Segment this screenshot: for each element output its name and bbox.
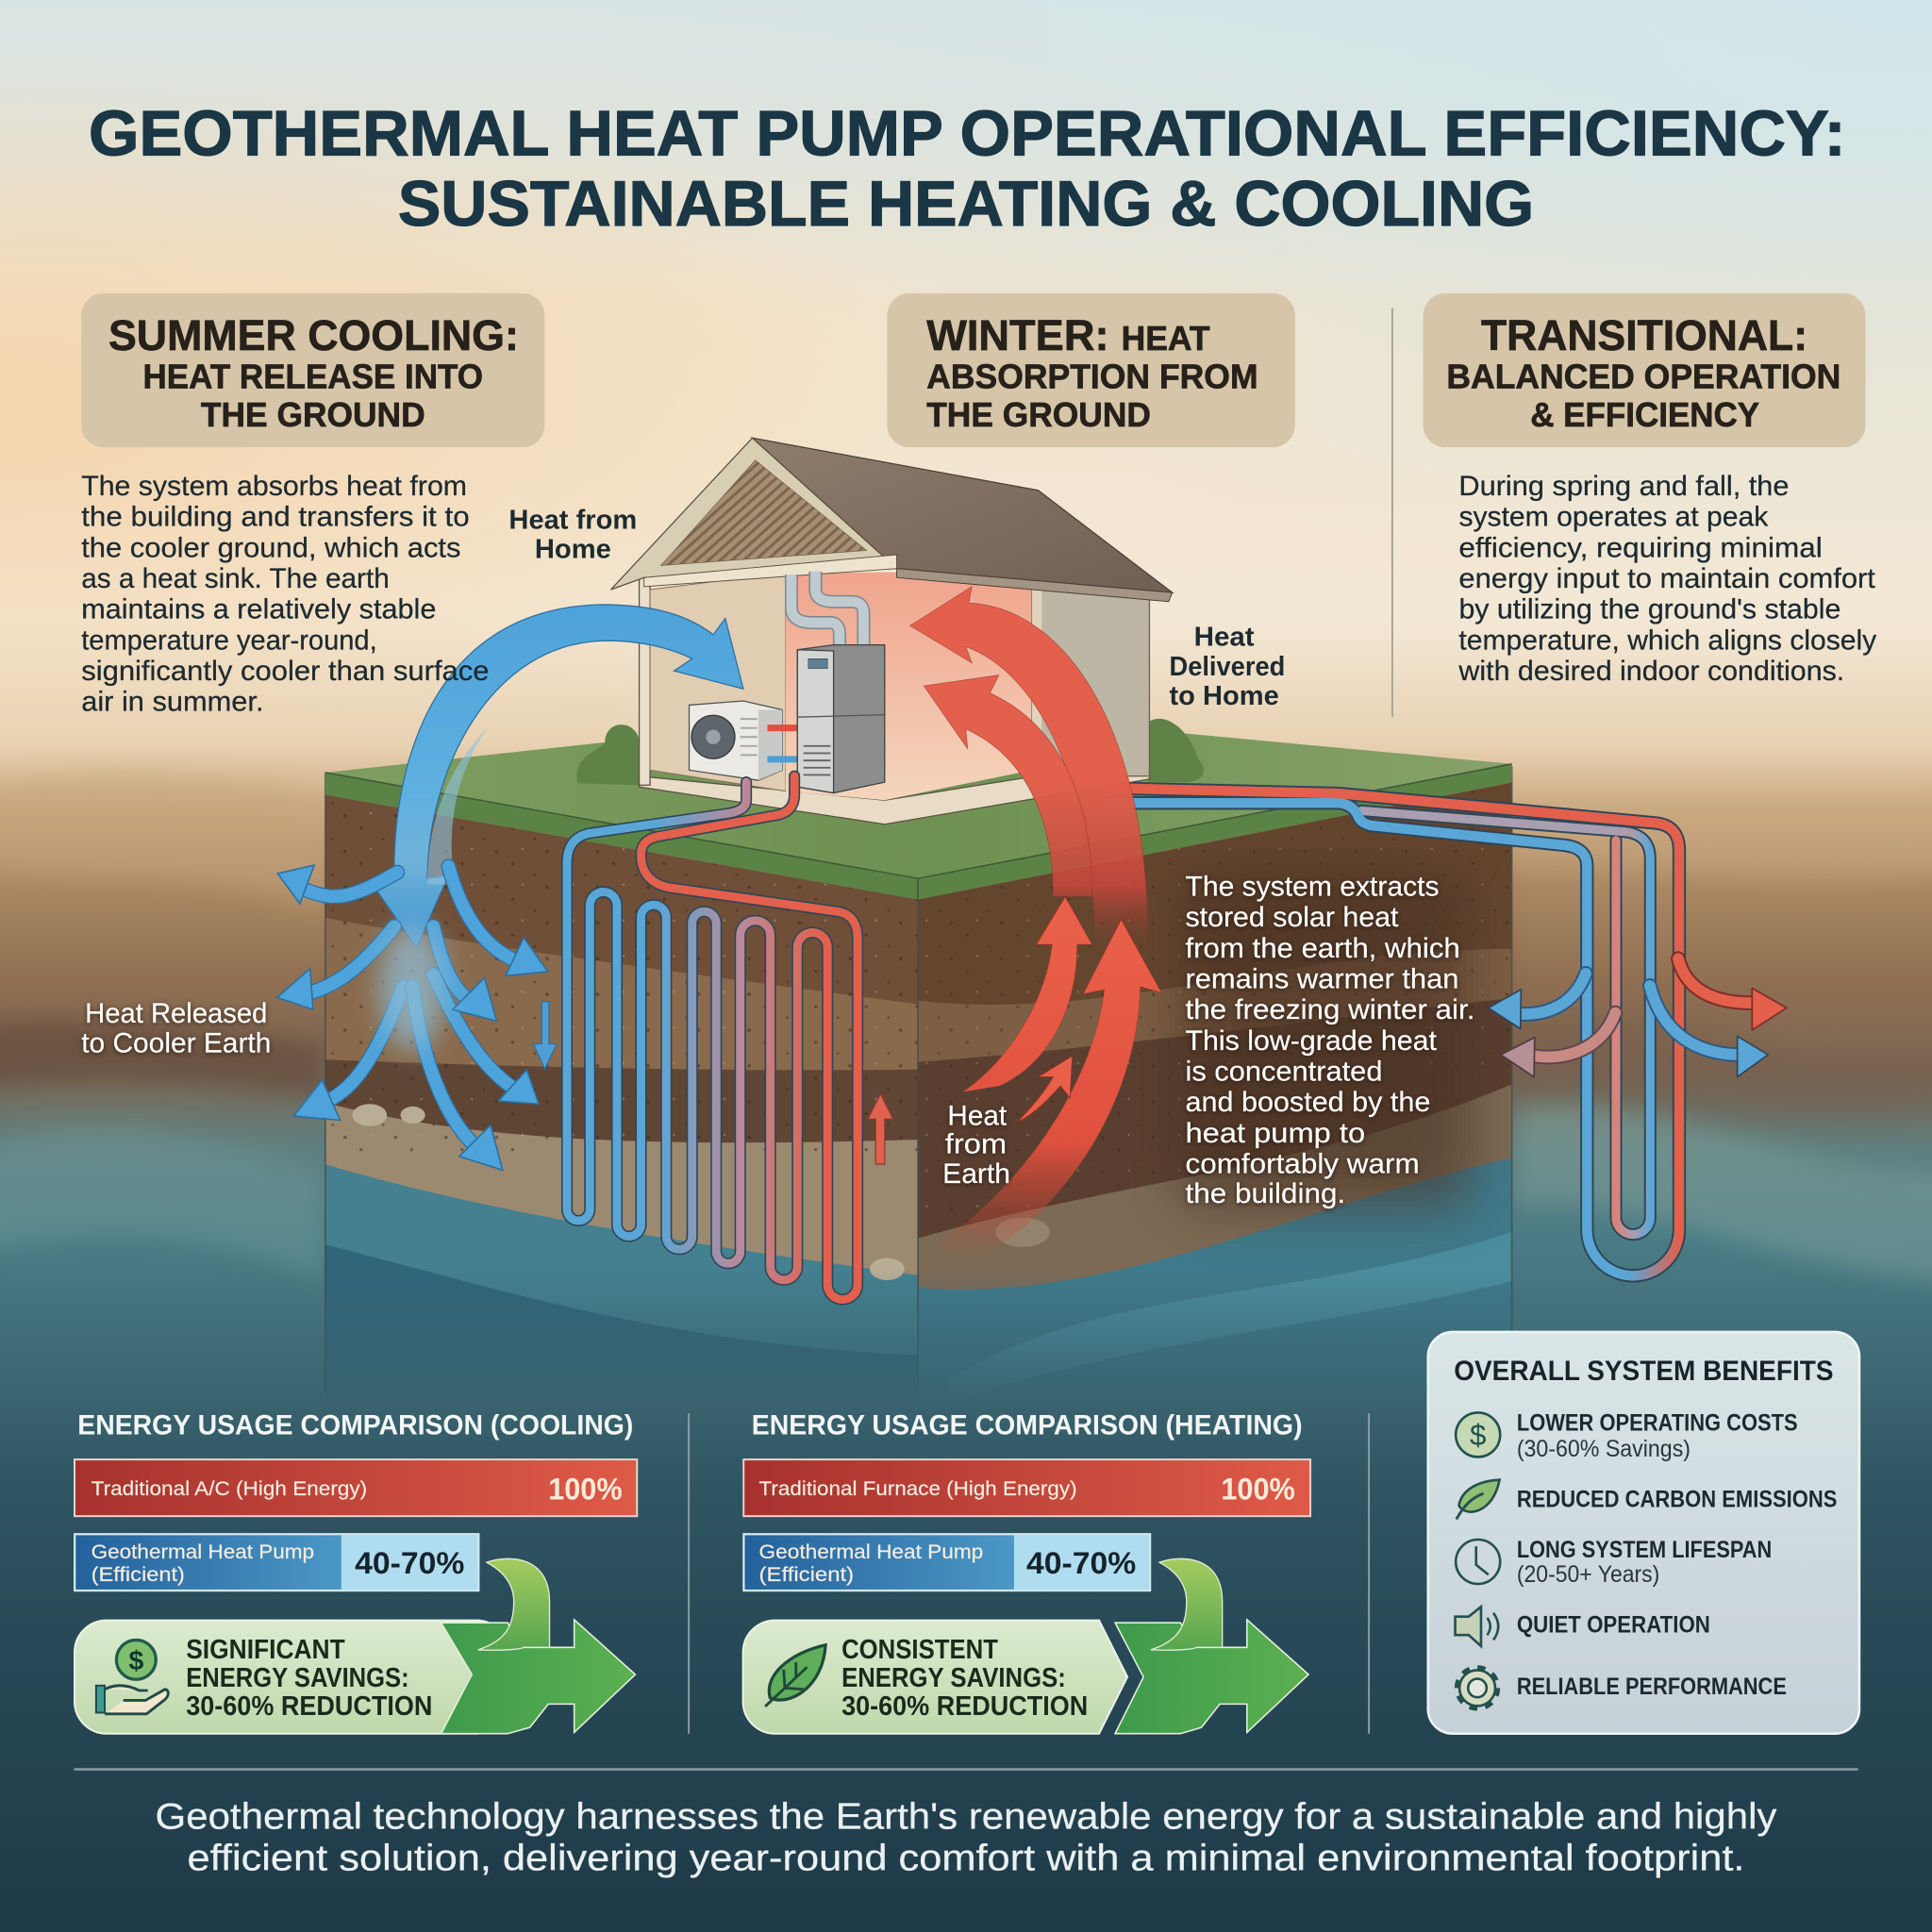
right soil face [918, 776, 1512, 1405]
text: winter description: comfortably warm [1185, 1148, 1420, 1179]
panel: winter heading: HEAT [1122, 319, 1210, 358]
title [89, 99, 1846, 240]
text: summer description: maintains a relatively stable [81, 594, 436, 625]
label: heat from home: Home [535, 535, 611, 565]
panel: transitional heading [1424, 293, 1865, 447]
right wall [1032, 587, 1149, 776]
interior warm glow wall [786, 572, 1032, 800]
heading: cooling: ENERGY USAGE COMPARISON (COOLING) [77, 1409, 633, 1441]
arrow: heat delivered lower red arc [924, 675, 1092, 896]
text: winter description: The system extracts [1185, 872, 1440, 903]
panel: summer heading [81, 293, 544, 447]
serpentine loop, house and flow arrows [277, 438, 1204, 1300]
furnace unit [797, 645, 885, 793]
serpentine ground loop [567, 776, 858, 1300]
panel: transitional heading: BALANCED OPERATION [1446, 357, 1840, 395]
benefit: lower operating costs: $ [1470, 1419, 1486, 1452]
text: savings [186, 1635, 432, 1722]
grass surface [325, 708, 1512, 878]
panel: transitional heading: TRANSITIONAL: [1481, 311, 1807, 359]
footer statement [156, 1796, 1777, 1879]
text: winter description: stored solar heat [1185, 902, 1399, 933]
arrow: heat delivered upper red arc [910, 587, 1148, 944]
text: summer description: the building and transfers it to [81, 502, 470, 533]
bushes [577, 719, 1204, 785]
footer statement: efficient solution, delivering year-round comfort with a minimal environmental footprint. [188, 1839, 1744, 1879]
label: heat from home [508, 505, 637, 565]
secondary fading blue arc [427, 728, 488, 885]
text: transitional description [1457, 471, 1876, 687]
bar: geothermal [743, 1534, 1150, 1591]
text: summer description: significantly cooler than surface [81, 656, 490, 687]
panel: cooling energy comparison [75, 1409, 637, 1734]
icon: leaf [765, 1645, 825, 1707]
label: heat from earth: Earth [942, 1158, 1010, 1190]
text: savings: ENERGY SAVINGS: [841, 1663, 1066, 1693]
label: heat delivered to home [1170, 622, 1285, 711]
bar: geothermal: Geothermal Heat Pump [759, 1540, 983, 1563]
arrow: green savings [1115, 1558, 1308, 1734]
text: summer description: The system absorbs heat from [81, 471, 467, 502]
benefit: reduced carbon [1457, 1480, 1837, 1519]
text: winter description: and boosted by the [1185, 1087, 1430, 1118]
title: GEOTHERMAL HEAT PUMP OPERATIONAL EFFICIENCY: [89, 99, 1846, 170]
house [611, 438, 1173, 824]
text: savings: SIGNIFICANT [186, 1635, 345, 1665]
text: summer description [81, 471, 490, 718]
small flow direction arrow down [533, 1002, 557, 1069]
text: transitional description: During spring and fall, the [1458, 471, 1789, 502]
text: transitional description: temperature, which aligns closely [1458, 625, 1876, 656]
text: transitional description: by utilizing the ground's stable [1458, 594, 1840, 625]
heading: heating: ENERGY USAGE COMPARISON (HEATING) [752, 1409, 1303, 1441]
bar: traditional furnace: 100% [1221, 1472, 1295, 1507]
text: winter description: from the earth, which [1185, 933, 1460, 964]
icon: dollar in hand: $ [128, 1646, 143, 1676]
text: savings: ENERGY SAVINGS: [186, 1663, 409, 1693]
benefit: reliable performance: RELIABLE PERFORMANCE [1517, 1674, 1787, 1700]
panel: overall system benefits [1428, 1332, 1859, 1734]
ground block cross-section [325, 708, 1513, 1406]
text: winter description: the building. [1185, 1178, 1345, 1209]
floor slab [640, 758, 1149, 824]
benefit: lower operating costs: LOWER OPERATING COSTS [1517, 1410, 1798, 1436]
arrow: heat from earth rising main [939, 919, 1161, 1270]
left soil face [325, 789, 918, 1405]
panel: winter heading: THE GROUND [926, 395, 1151, 434]
roof main plane [752, 438, 1173, 592]
text: winter description [1185, 872, 1474, 1209]
label: heat from home: Heat from [508, 505, 637, 535]
bar: traditional furnace: Traditional Furnace (High Energy) [759, 1476, 1077, 1500]
bar: traditional AC [75, 1459, 637, 1516]
label: heat released to cooler earth: to Cooler Earth [81, 1027, 271, 1058]
bar: geothermal: Geothermal Heat Pump [92, 1540, 314, 1563]
gable trim [611, 438, 897, 590]
ducts [791, 572, 863, 647]
benefit: reliable performance [1457, 1668, 1787, 1708]
benefit: lower operating costs: (30-60% Savings) [1517, 1437, 1690, 1462]
left wall frame [640, 577, 650, 785]
label: heat delivered to home: Heat [1194, 622, 1255, 652]
gable wood slats [661, 460, 867, 565]
text: winter description: remains warmer than [1185, 964, 1458, 995]
label: heat from earth: Heat [947, 1100, 1008, 1131]
text: transitional description: efficiency, requiring minimal [1458, 532, 1823, 563]
text: transitional description: energy input to maintain comfort [1458, 563, 1876, 594]
text: transitional description: system operates at peak [1458, 502, 1769, 533]
savings callout [743, 1558, 1308, 1734]
fade to dark base [325, 1269, 1513, 1406]
bar: geothermal: (Efficient) [92, 1562, 185, 1586]
benefit: long lifespan: LONG SYSTEM LIFESPAN [1517, 1538, 1772, 1563]
bar: geothermal: 40-70% [355, 1545, 464, 1580]
arrow: heat from home big blue arc [370, 605, 743, 947]
text: transitional description: with desired indoor conditions. [1457, 656, 1844, 687]
panel: summer heading: THE GROUND [201, 395, 425, 434]
text: savings: CONSISTENT [841, 1635, 998, 1665]
text: summer description: the cooler ground, which acts [81, 532, 460, 563]
bar: geothermal [75, 1534, 478, 1591]
text: summer description: air in summer. [81, 687, 264, 718]
heading: benefits: OVERALL SYSTEM BENEFITS [1454, 1356, 1834, 1387]
footer statement: Geothermal technology harnesses the Earth's renewable energy for a sustainable and highly [156, 1796, 1777, 1837]
text: savings [841, 1635, 1088, 1722]
benefit: long lifespan [1456, 1538, 1772, 1588]
savings callout [75, 1558, 635, 1734]
benefit: reduced carbon: REDUCED CARBON EMISSIONS [1517, 1487, 1837, 1512]
text: winter description: is concentrated [1185, 1056, 1382, 1087]
text: savings: 30-60% REDUCTION [186, 1691, 432, 1722]
text: savings: 30-60% REDUCTION [841, 1691, 1088, 1722]
small flow direction arrow up [868, 1093, 893, 1164]
benefit: lower operating costs [1456, 1410, 1798, 1462]
panel: summer heading: HEAT RELEASE INTO [143, 357, 483, 395]
title: SUSTAINABLE HEATING & COOLING [398, 169, 1534, 240]
panel: transitional heading: & EFFICIENCY [1530, 395, 1759, 434]
text: winter description: This low-grade heat [1185, 1025, 1438, 1057]
label: heat delivered to home: to Home [1170, 681, 1279, 711]
panel: winter heading [887, 293, 1295, 447]
text: summer description: temperature year-round, [81, 625, 377, 656]
vertical loop pipes on right [1109, 788, 1787, 1275]
benefit: long lifespan: (20-50+ Years) [1517, 1562, 1659, 1588]
label: heat released to cooler earth: Heat Released [85, 998, 267, 1029]
pipe branch arrows [1489, 958, 1787, 1077]
refrigerant stubs [767, 723, 797, 733]
bar: traditional AC: 100% [548, 1472, 623, 1507]
outdoor condenser unit [690, 701, 782, 780]
bar: traditional furnace [743, 1459, 1310, 1516]
label: heat from earth: from [945, 1129, 1007, 1160]
interior back wall [650, 573, 786, 791]
bar: geothermal: (Efficient) [759, 1562, 854, 1586]
blurred dark halo behind winter text [1176, 869, 1473, 1208]
arrow: small heat from earth [1017, 1056, 1073, 1122]
arrow: green savings [441, 1558, 635, 1734]
panel: summer heading: SUMMER COOLING: [108, 311, 519, 359]
text: winter description: heat pump to [1185, 1118, 1365, 1149]
text: summer description: as a heat sink. The earth [81, 563, 390, 594]
arrows: heat released to earth [277, 865, 548, 1170]
benefit: quiet operation [1456, 1607, 1710, 1646]
bar: traditional AC: Traditional A/C (High Energy) [92, 1476, 367, 1500]
icon: dollar in hand [96, 1640, 168, 1714]
label: heat released to cooler earth [81, 998, 271, 1058]
label: heat delivered to home: Delivered [1170, 652, 1285, 682]
arrow: heat from earth rising left [963, 896, 1092, 1092]
block edge lines [325, 766, 1512, 1392]
label: heat from earth [942, 1100, 1010, 1190]
bar: geothermal: 40-70% [1026, 1545, 1136, 1580]
panel: winter heading: WINTER: [926, 311, 1109, 359]
text: winter description: the freezing winter air. [1185, 994, 1474, 1025]
panel: heating energy comparison [743, 1409, 1310, 1734]
panel: winter heading: ABSORPTION FROM [926, 357, 1258, 395]
benefit: quiet operation: QUIET OPERATION [1517, 1613, 1710, 1639]
